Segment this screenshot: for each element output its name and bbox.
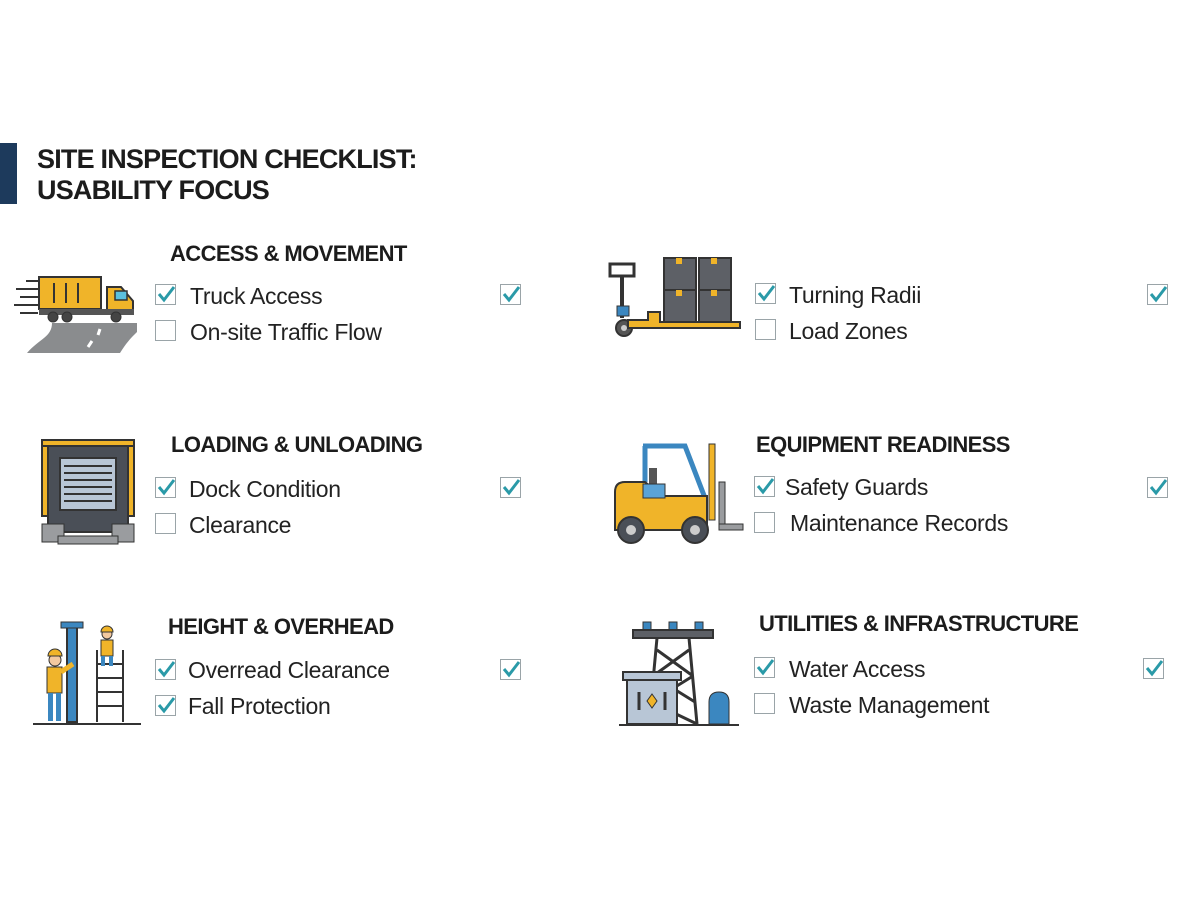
status check xyxy=(1147,477,1168,498)
icon: utility tower xyxy=(619,622,739,726)
heading: EQUIPMENT READINESS xyxy=(756,432,1010,457)
heading: ACCESS & MOVEMENT xyxy=(170,241,407,266)
icon: workers and ladder xyxy=(33,622,141,725)
title: SITE INSPECTION CHECKLIST: xyxy=(37,144,417,174)
item: fall protection: Fall Protection xyxy=(188,693,331,719)
heading: UTILITIES & INFRASTRUCTURE xyxy=(759,611,1078,636)
item: clearance: Clearance xyxy=(189,512,291,538)
status check xyxy=(500,659,521,680)
panel: loading & unloading xyxy=(41,432,521,544)
item: truck access: Truck Access xyxy=(190,283,322,309)
icon: truck xyxy=(14,276,137,353)
title xyxy=(37,144,417,205)
item: waste management: Waste Management xyxy=(789,692,989,718)
title accent bar xyxy=(0,143,17,204)
title: USABILITY FOCUS xyxy=(37,175,269,205)
checkbox checked xyxy=(155,284,176,305)
icon: pallet jack xyxy=(608,257,741,337)
panel: equipment readiness xyxy=(614,432,1168,544)
panel: turning/load xyxy=(608,257,1168,344)
icon: forklift xyxy=(614,444,744,544)
heading: HEIGHT & OVERHEAD xyxy=(168,614,394,639)
item: safety guards: Safety Guards xyxy=(785,474,928,500)
item: turning radii: Turning Radii xyxy=(789,282,921,308)
item: overhead clearance: Overread Clearance xyxy=(188,657,390,683)
status check xyxy=(500,477,521,498)
item: maintenance records: Maintenance Records xyxy=(790,510,1008,536)
item: dock condition: Dock Condition xyxy=(189,476,341,502)
item: load zones: Load Zones xyxy=(789,318,907,344)
status check xyxy=(1143,658,1164,679)
item: water access: Water Access xyxy=(789,656,925,682)
heading: LOADING & UNLOADING xyxy=(171,432,422,457)
panel: utilities & infrastructure xyxy=(619,611,1164,726)
panel: access & movement xyxy=(14,241,521,353)
item: traffic flow: On-site Traffic Flow xyxy=(190,319,382,345)
panel: height & overhead xyxy=(33,614,521,725)
status check xyxy=(500,284,521,305)
icon: loading dock xyxy=(41,439,135,544)
status check xyxy=(1147,284,1168,305)
